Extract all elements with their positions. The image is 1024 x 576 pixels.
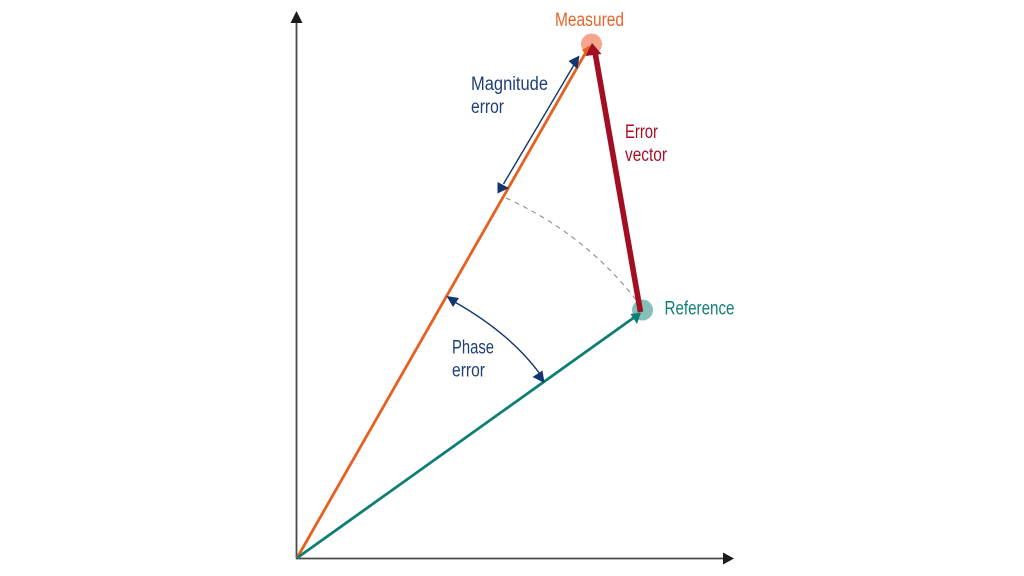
x axis arrow xyxy=(296,552,734,564)
phase error double arrow xyxy=(446,296,544,383)
label: reference: Reference xyxy=(664,298,734,320)
label: magnitude error: Magnitude xyxy=(471,74,548,95)
y axis arrow xyxy=(290,11,302,558)
label: error vector: vector xyxy=(625,145,668,166)
label: measured: Measured xyxy=(555,10,624,31)
label: phase error: Phase xyxy=(452,338,494,358)
label: error vector: Error xyxy=(625,122,659,143)
measured vector arrow xyxy=(297,45,590,558)
reference vector arrow xyxy=(297,312,641,558)
dashed arc xyxy=(506,198,637,301)
label: phase error: error xyxy=(452,360,486,382)
measured point xyxy=(581,34,602,54)
magnitude error double arrow xyxy=(498,56,580,194)
label: magnitude error: error xyxy=(471,97,505,118)
error vector arrow xyxy=(586,43,640,312)
reference point xyxy=(632,300,653,320)
